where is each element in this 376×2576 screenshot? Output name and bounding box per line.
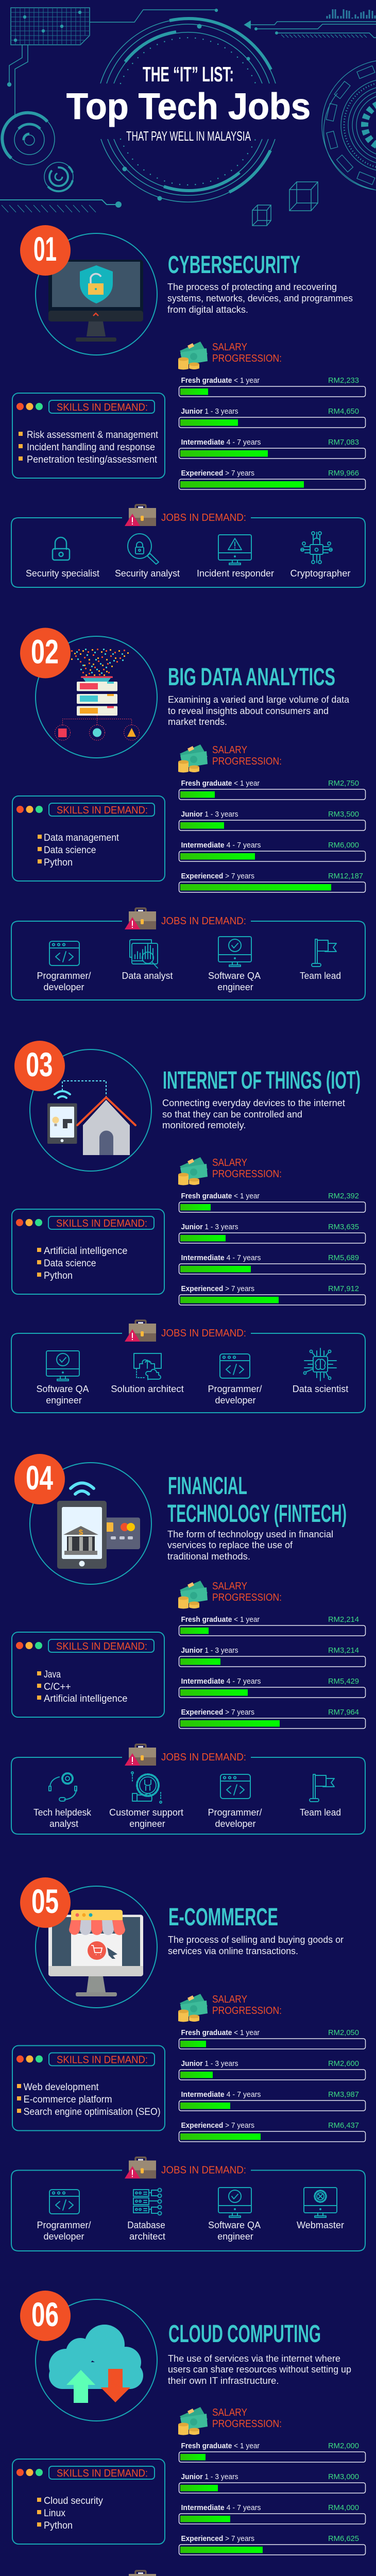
heading [167, 1472, 347, 1528]
section 03: internet of things [11, 1041, 366, 1413]
bar: fresh graduate: RM2,233 [328, 376, 359, 385]
bar: fresh graduate: Fresh graduate < 1 year [181, 2029, 260, 2037]
section 01: cybersecurity [11, 225, 366, 587]
job: incident responder: Incident responder [197, 568, 274, 579]
number badge [14, 1041, 65, 1091]
job: programmer [37, 941, 91, 992]
number badge: 01 [33, 230, 57, 268]
skills in demand panel [12, 796, 165, 881]
skills in demand panel: Penetration testing/assessment [27, 454, 158, 465]
illustration circle: monitor with shield [36, 233, 157, 355]
skills in demand panel: Artificial intelligence [44, 1246, 128, 1257]
description: to reveal insights about consumers and [168, 706, 329, 716]
job: programmer: Programmer/ [37, 971, 91, 981]
heading: CYBERSECURITY [168, 251, 300, 279]
skills in demand panel: Data science [44, 1258, 96, 1269]
skills in demand panel: Java [44, 1669, 61, 1680]
job: tech helpdesk [33, 1773, 92, 1829]
bar: experienced [179, 872, 366, 892]
circuit grid panel [7, 8, 218, 117]
description: Connecting everyday devices to the internet [162, 1098, 345, 1108]
skills in demand panel: Risk assessment & management [27, 430, 159, 440]
description: traditional methods. [167, 1551, 250, 1562]
salary progression: SALARY [212, 342, 247, 353]
job: software QA: engineer [217, 982, 253, 992]
bar: fresh graduate: Fresh graduate < 1 year [181, 1616, 260, 1624]
bar: intermediate: RM4,000 [328, 2503, 359, 2512]
bar: junior [179, 1223, 366, 1243]
jobs in demand panel [11, 2571, 365, 2576]
number badge [20, 2291, 71, 2341]
bar: experienced: Experienced > 7 years [181, 872, 254, 880]
number badge: 06 [31, 2295, 59, 2333]
bar: junior: RM2,600 [328, 2059, 359, 2068]
bar: experienced [179, 1708, 366, 1728]
salary progression [178, 1581, 366, 1728]
job: programmer: developer [43, 982, 84, 992]
description: The form of technology used in financial [167, 1529, 333, 1539]
job: programmer: developer [215, 1819, 256, 1829]
description: users can share resources without setting up [168, 2364, 351, 2375]
bar: junior [179, 407, 366, 428]
description: monitored remotely. [162, 1120, 246, 1130]
salary progression [178, 2407, 366, 2555]
skills in demand panel: SKILLS IN DEMAND: [56, 1218, 147, 1229]
jobs in demand panel: JOBS IN DEMAND: [161, 916, 246, 927]
skills in demand panel [12, 2459, 165, 2544]
salary progression: PROGRESSION: [212, 1168, 282, 1180]
bar: junior: RM3,635 [328, 1223, 359, 1231]
bar: intermediate: RM5,689 [328, 1253, 359, 1262]
job: data analyst: Data analyst [122, 971, 173, 981]
skills in demand panel: Web development [24, 2082, 99, 2093]
heading: FINANCIAL [168, 1472, 247, 1500]
skills in demand panel: Linux [44, 2508, 65, 2519]
skills in demand panel [12, 1209, 164, 1294]
description [168, 694, 350, 727]
description: their own IT infrastructure. [168, 2376, 279, 2386]
description: so that they can be controlled and [162, 1109, 302, 1120]
bar: intermediate: Intermediate 4 - 7 years [181, 841, 261, 850]
section 05: e-commerce [11, 1877, 366, 2251]
jobs in demand panel [11, 1744, 365, 1834]
bar: junior: RM3,000 [328, 2472, 359, 2481]
bar: fresh graduate [179, 779, 366, 800]
job: programmer: Programmer/ [37, 2220, 91, 2230]
salary progression: SALARY [212, 744, 247, 756]
bar: experienced: Experienced > 7 years [181, 1708, 254, 1717]
job: programmer: Programmer/ [208, 1807, 262, 1818]
skills in demand panel: Search engine optimisation (SEO) [24, 2107, 161, 2117]
skills in demand panel [12, 393, 165, 478]
salary progression: SALARY [212, 1994, 247, 2005]
job: programmer [37, 2190, 91, 2242]
section 02: big data analytics [11, 628, 366, 1000]
job: security specialist: Security specialist [26, 568, 99, 579]
gear rings at right edge [322, 60, 376, 191]
bar: fresh graduate [179, 1615, 366, 1636]
jobs in demand panel [11, 2158, 365, 2251]
number badge: 02 [31, 633, 59, 671]
description: from digital attacks. [167, 304, 248, 315]
bar: experienced [179, 1284, 366, 1305]
illustration circle: smart home [30, 1049, 151, 1171]
salary progression [178, 744, 366, 892]
bar: experienced [179, 469, 366, 489]
salary progression: PROGRESSION: [212, 2005, 282, 2016]
job: team lead: Team lead [300, 1807, 341, 1818]
salary progression: PROGRESSION: [212, 2418, 282, 2430]
description [162, 1098, 345, 1130]
bar: fresh graduate: RM2,000 [328, 2442, 359, 2450]
bar: intermediate [179, 1253, 366, 1274]
section 06: cloud computing [11, 2291, 366, 2576]
bar: fresh graduate: Fresh graduate < 1 year [181, 779, 260, 788]
job: cryptographer: Cryptographer [290, 568, 351, 579]
job: tech helpdesk: Tech helpdesk [33, 1807, 92, 1818]
bar: intermediate [179, 841, 366, 861]
job: data scientist [293, 1348, 348, 1394]
skills in demand panel: SKILLS IN DEMAND: [57, 2055, 148, 2066]
description: services via online transactions. [168, 1946, 298, 1956]
jobs in demand panel: JOBS IN DEMAND: [161, 1752, 246, 1763]
bar: intermediate: Intermediate 4 - 7 years [181, 2504, 261, 2512]
bar: intermediate: RM7,083 [328, 438, 359, 447]
job: customer support: engineer [129, 1819, 165, 1829]
job: team lead [300, 1774, 341, 1818]
job: security specialist [26, 537, 99, 579]
job: programmer [208, 1354, 262, 1405]
bar: junior: Junior 1 - 3 years [181, 2473, 238, 2481]
skills in demand panel: Incident handling and response [27, 442, 155, 453]
header: title block with tech decoration [0, 8, 376, 226]
skills in demand panel: SKILLS IN DEMAND: [57, 402, 148, 413]
job: team lead: Team lead [300, 971, 341, 981]
skills in demand panel: Python [44, 857, 73, 868]
title text: THE “IT” LIST: [143, 62, 234, 86]
bar: fresh graduate [179, 1192, 366, 1212]
number badge [20, 1877, 71, 1928]
bar: intermediate: RM3,987 [328, 2090, 359, 2099]
description: Examining a varied and large volume of data [168, 694, 350, 705]
bar: experienced [179, 2534, 366, 2555]
job: cryptographer [290, 532, 351, 579]
small target circles [2, 113, 73, 191]
description: The process of selling and buying goods or [168, 1935, 344, 1945]
job: programmer: Programmer/ [208, 1384, 262, 1394]
bar: experienced: RM9,966 [328, 469, 359, 478]
description [168, 1935, 344, 1956]
bar: intermediate: RM6,000 [328, 841, 359, 850]
bar: junior: Junior 1 - 3 years [181, 1223, 238, 1231]
jobs in demand panel [11, 908, 365, 1000]
number badge [20, 225, 71, 276]
job: programmer [208, 1774, 262, 1829]
illustration circle: mobile banking: $ [79, 1528, 83, 1537]
job: security analyst: Security analyst [115, 568, 180, 579]
description: systems, networks, devices, and programmes [167, 293, 353, 303]
job: team lead [300, 939, 341, 981]
bar: fresh graduate: RM2,750 [328, 779, 359, 788]
skills in demand panel: Data management [44, 833, 119, 843]
job: database architect: Database [127, 2220, 165, 2230]
skills in demand panel: Artificial intelligence [44, 1693, 128, 1704]
salary progression: SALARY [212, 2407, 247, 2418]
number badge: 05 [31, 1882, 59, 1920]
job: programmer: developer [215, 1395, 256, 1405]
job: database architect [127, 2189, 165, 2242]
bar: junior [179, 810, 366, 831]
bar: fresh graduate: RM2,050 [328, 2028, 359, 2037]
skills in demand panel [12, 1632, 164, 1717]
bar: junior [179, 2059, 366, 2080]
skills in demand panel: SKILLS IN DEMAND: [57, 805, 148, 816]
skills in demand panel [12, 2045, 165, 2131]
job: programmer: developer [43, 2231, 84, 2242]
bar: experienced: Experienced > 7 years [181, 2122, 254, 2130]
jobs in demand panel [11, 1320, 365, 1413]
salary progression: PROGRESSION: [212, 756, 282, 767]
heading: E-COMMERCE [168, 1904, 278, 1931]
bar: experienced: RM7,912 [328, 1284, 359, 1293]
job: software QA [208, 2188, 261, 2242]
bar: intermediate: Intermediate 4 - 7 years [181, 1254, 261, 1262]
jobs in demand panel: JOBS IN DEMAND: [161, 2165, 246, 2176]
number badge [14, 1454, 65, 1504]
job: customer support: Customer support [109, 1807, 183, 1818]
skills in demand panel: Cloud security [44, 2496, 103, 2506]
illustration circle: online store [36, 1886, 157, 2008]
skills in demand panel: C/C++ [44, 1682, 71, 1692]
bar: intermediate [179, 1677, 366, 1698]
job: software QA: engineer [217, 2231, 253, 2242]
bar: fresh graduate [179, 2442, 366, 2462]
job: solution architect: Solution architect [111, 1384, 184, 1394]
salary progression: PROGRESSION: [212, 353, 282, 364]
bar: fresh graduate: RM2,392 [328, 1192, 359, 1200]
bar: fresh graduate: Fresh graduate < 1 year [181, 377, 260, 385]
bar: junior: RM4,650 [328, 407, 359, 416]
skills in demand panel: Data science [44, 845, 96, 856]
skills in demand panel: Python [44, 1270, 73, 1281]
bar: experienced: RM7,964 [328, 1708, 359, 1717]
bar: intermediate: Intermediate 4 - 7 years [181, 1677, 261, 1686]
description [167, 282, 353, 315]
description: market trends. [168, 717, 227, 727]
job: database architect: architect [129, 2231, 165, 2242]
bar: intermediate: Intermediate 4 - 7 years [181, 2091, 261, 2099]
bar: experienced: RM12,187 [328, 872, 363, 880]
illustration circle: data servers [36, 636, 157, 758]
wireframe cubes [252, 182, 318, 226]
salary progression [178, 342, 366, 489]
salary progression: SALARY [212, 1581, 247, 1592]
bar: fresh graduate: RM2,214 [328, 1615, 359, 1624]
job: tech helpdesk: analyst [49, 1819, 78, 1829]
big ring frame around title [100, 19, 276, 202]
job: software QA: Software QA [208, 2220, 261, 2230]
number badge: 04 [26, 1459, 53, 1497]
bar: intermediate: RM5,429 [328, 1677, 359, 1686]
job: software QA: Software QA [36, 1384, 89, 1394]
job: data analyst [122, 940, 173, 981]
job: customer support [109, 1772, 183, 1829]
salary progression [178, 1994, 366, 2142]
bar: junior: Junior 1 - 3 years [181, 408, 238, 416]
bar: junior: RM3,500 [328, 810, 359, 819]
illustration circle: cloud with arrows [36, 2299, 157, 2421]
job: webmaster [297, 2188, 344, 2230]
job: software QA [208, 937, 261, 992]
job: webmaster: Webmaster [297, 2220, 344, 2230]
number badge: 03 [26, 1045, 53, 1083]
bar: experienced [179, 2121, 366, 2142]
job: software QA: Software QA [208, 971, 261, 981]
circuit lines left and hatch [0, 200, 122, 212]
illustration circle: mobile banking [30, 1463, 151, 1584]
bar: intermediate: Intermediate 4 - 7 years [181, 438, 261, 447]
circuit lines top right with bars [245, 9, 376, 38]
description: The use of services via the internet where [168, 2353, 340, 2364]
title text: THAT PAY WELL IN MALAYSIA [126, 128, 251, 144]
bar: experienced: Experienced > 7 years [181, 2535, 254, 2543]
job: solution architect [111, 1353, 184, 1394]
bar: fresh graduate [179, 2028, 366, 2049]
description [167, 1529, 333, 1562]
bar: intermediate [179, 2503, 366, 2524]
skills in demand panel: SKILLS IN DEMAND: [56, 1641, 147, 1652]
job: security analyst [115, 534, 180, 579]
bar: junior: Junior 1 - 3 years [181, 2060, 238, 2068]
jobs in demand panel: JOBS IN DEMAND: [161, 1328, 246, 1339]
bar: intermediate [179, 2090, 366, 2111]
skills in demand panel: Python [44, 2520, 73, 2531]
job: software QA: engineer [46, 1395, 82, 1405]
job: incident responder [197, 535, 274, 579]
bar: experienced: Experienced > 7 years [181, 469, 254, 478]
job: software QA [36, 1351, 89, 1405]
salary progression: SALARY [212, 1157, 247, 1168]
bar: junior: Junior 1 - 3 years [181, 1647, 238, 1655]
bar: junior: RM3,214 [328, 1646, 359, 1655]
description: The process of protecting and recovering [167, 282, 337, 292]
title text: Top Tech Jobs [66, 87, 311, 127]
salary progression: PROGRESSION: [212, 1592, 282, 1603]
job: data scientist: Data scientist [293, 1384, 348, 1394]
salary progression [178, 1157, 366, 1305]
bar: experienced: Experienced > 7 years [181, 1285, 254, 1293]
skills in demand panel: E-commerce platform [24, 2094, 112, 2105]
bar: experienced: RM6,437 [328, 2121, 359, 2130]
section 04: fintech [11, 1454, 366, 1834]
description: vservices to replace the use of [167, 1540, 293, 1550]
description [168, 2353, 351, 2386]
bar: fresh graduate [179, 376, 366, 397]
bar: junior [179, 2472, 366, 2493]
bar: experienced: RM6,625 [328, 2534, 359, 2543]
bar: junior: Junior 1 - 3 years [181, 810, 238, 819]
number badge [20, 628, 71, 678]
bar: fresh graduate: Fresh graduate < 1 year [181, 2442, 260, 2450]
title text [66, 62, 311, 144]
jobs in demand panel: JOBS IN DEMAND: [161, 512, 246, 523]
bar: junior [179, 1646, 366, 1667]
bar: intermediate [179, 438, 366, 459]
skills in demand panel: SKILLS IN DEMAND: [57, 2468, 148, 2479]
bar: fresh graduate: Fresh graduate < 1 year [181, 1192, 260, 1200]
jobs in demand panel [11, 505, 365, 587]
